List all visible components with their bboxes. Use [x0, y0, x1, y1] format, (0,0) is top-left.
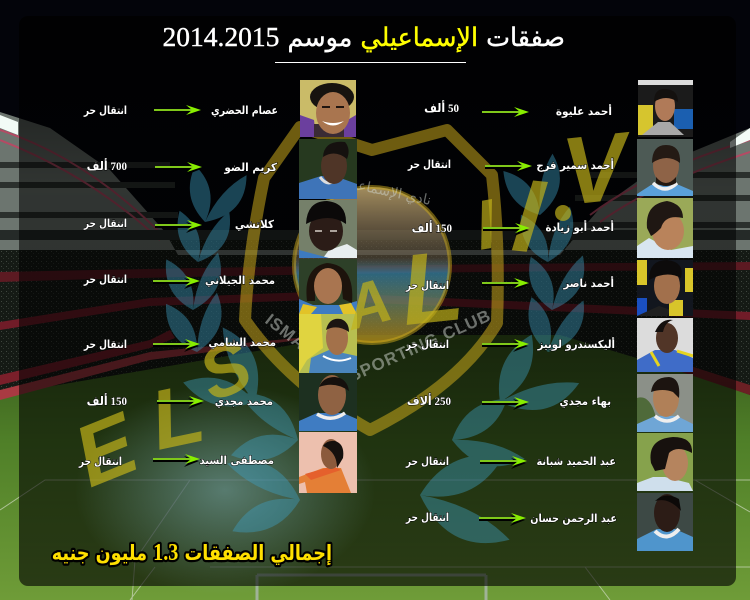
photo: Essam El Hadary — [300, 80, 356, 137]
row: Ahmed Samir Farag: أحمد سمير فرج — [536, 158, 614, 173]
row: Ahmed Samir Farag — [407, 158, 614, 174]
photo: Kalatchi — [299, 200, 357, 258]
crest wording: SPORTING CLUB — [346, 306, 494, 386]
arrow — [479, 513, 526, 526]
row: Bahaa Magdy — [407, 393, 611, 410]
row: Essam El Hadary: عصام الحضري — [211, 104, 278, 117]
arrow — [155, 162, 202, 175]
photo: Ahmed Eliwa — [638, 80, 693, 137]
row: Alexandro Lopes: انتقال حر — [405, 339, 449, 351]
row: Ahmed Nasser: أحمد ناصر — [563, 276, 614, 290]
row: Mostafa El Sayed — [78, 454, 274, 468]
row: Ahmed Eliwa — [424, 100, 612, 120]
row: Bahaa Magdy: 250 ألاف — [407, 393, 451, 408]
row: Karim El Dow: 700 ألف — [87, 158, 127, 173]
watermark: graffiti lettering — [61, 112, 639, 506]
row: Mostafa El Sayed: انتقال حر — [78, 456, 122, 468]
row: Ahmed Abou Zeyada: 150 ألف — [412, 220, 452, 235]
row: Abdel Hamid Shabana: عبد الحميد شبانة — [537, 455, 616, 468]
watermark: graffiti lettering: L — [396, 229, 468, 347]
left column photos — [299, 80, 357, 493]
row: Ahmed Samir Farag: انتقال حر — [407, 159, 451, 171]
row: Abdel Hamid Shabana — [405, 455, 616, 469]
row: Essam El Hadary — [83, 104, 278, 118]
row: Ahmed Eliwa: 50 ألف — [424, 100, 459, 115]
row: Abdel Rahman Hassan: انتقال حر — [405, 512, 449, 524]
photo: Mohamed Magdy — [299, 373, 357, 431]
photo: Karim El Dow — [299, 139, 357, 199]
photo: Mostafa El Sayed — [299, 432, 357, 493]
arrow — [482, 397, 529, 410]
arrow — [485, 161, 532, 174]
row: Kalatchi: انتقال حر — [83, 218, 127, 230]
photo: Bahaa Magdy — [637, 374, 693, 432]
title: صفقات الإسماعيلي موسم 2014.2015 — [162, 21, 565, 53]
left column transfers — [78, 104, 278, 468]
arrow — [155, 220, 202, 233]
row: Kalatchi — [83, 218, 275, 233]
row: Mostafa El Sayed: مصطفى السيد — [199, 455, 274, 467]
right column photos — [637, 80, 693, 551]
row: Ahmed Nasser: انتقال حر — [405, 280, 449, 292]
photo: Alexandro Lopes — [637, 318, 693, 372]
row: Mohamed El Shamy — [83, 337, 276, 352]
row: Alexandro Lopes: أليكسندرو لوبيز — [537, 337, 615, 351]
photo: Mohamed El Shamy — [299, 314, 357, 373]
watermark: graffiti lettering: I — [469, 184, 503, 265]
photo: Ahmed Abou Zeyada — [637, 198, 693, 258]
arrow — [153, 276, 200, 289]
row: Mohamed Magdy: 150 ألف — [87, 393, 127, 408]
row: Mohamed Magdy — [87, 393, 273, 409]
football — [294, 187, 450, 343]
row: Kalatchi: كلاتشي — [235, 218, 275, 231]
shield outline — [245, 127, 498, 430]
row: Essam El Hadary: انتقال حر — [83, 105, 127, 117]
arrow — [483, 223, 530, 236]
watermark: graffiti lettering: I — [508, 158, 551, 276]
laurel leaves — [164, 153, 586, 543]
row: Abdel Rahman Hassan — [405, 512, 617, 526]
crest wording: ISMAILY — [262, 310, 332, 371]
photo: Ahmed Samir Farag — [637, 139, 693, 196]
centre glow — [75, 385, 375, 595]
row: Mohamed Magdy: محمد مجدي — [215, 396, 273, 408]
row: Bahaa Magdy: بهاء مجدي — [559, 396, 611, 408]
right column transfers — [405, 100, 617, 526]
watermark: graffiti lettering: E — [61, 394, 153, 506]
crest wording: نادي الإسماعيلي — [337, 174, 432, 209]
row: Abdel Hamid Shabana: انتقال حر — [405, 456, 449, 468]
row: Ahmed Abou Zeyada: أحمد أبو زيادة — [545, 220, 614, 234]
arrow — [157, 396, 204, 409]
row: Ahmed Abou Zeyada — [412, 220, 614, 236]
row: Ahmed Eliwa: أحمد عليوة — [556, 104, 612, 118]
arrow — [154, 105, 201, 118]
photo: Abdel Hamid Shabana — [637, 433, 693, 491]
row: Karim El Dow: كريم الضو — [223, 161, 278, 174]
photo: Abdel Rahman Hassan — [637, 493, 693, 551]
row: Abdel Rahman Hassan: عبد الرحمن حسان — [530, 512, 617, 525]
row: Mohamed El Gilany — [83, 274, 275, 289]
arrow — [153, 339, 200, 352]
arrow — [482, 107, 529, 120]
row: Mohamed El Shamy: انتقال حر — [83, 339, 127, 351]
arrow — [153, 454, 200, 467]
watermark: graffiti lettering: V — [557, 112, 639, 226]
row: Mohamed El Shamy: محمد الشامي — [209, 337, 276, 349]
row: Karim El Dow — [87, 158, 278, 175]
crest wording — [262, 174, 494, 386]
arrow — [482, 339, 529, 352]
watermark: club crest — [164, 127, 586, 543]
watermark: graffiti lettering: A — [336, 265, 399, 344]
arrow — [482, 278, 529, 291]
row: Mohamed El Gilany: انتقال حر — [83, 274, 127, 286]
title underline — [275, 62, 466, 63]
arrow — [480, 456, 527, 469]
photo: Mohamed El Gilany — [299, 259, 357, 314]
row: Ahmed Nasser — [405, 276, 614, 292]
row: Alexandro Lopes — [405, 337, 615, 352]
total callout: إجمالي الصفقات 1.3 مليون جنيه — [52, 538, 332, 565]
row: Mohamed El Gilany: محمد الجيلاني — [205, 275, 275, 287]
watermark: graffiti lettering: L — [142, 365, 212, 468]
photo: Ahmed Nasser — [637, 260, 693, 316]
watermark: graffiti lettering: S — [188, 325, 263, 417]
